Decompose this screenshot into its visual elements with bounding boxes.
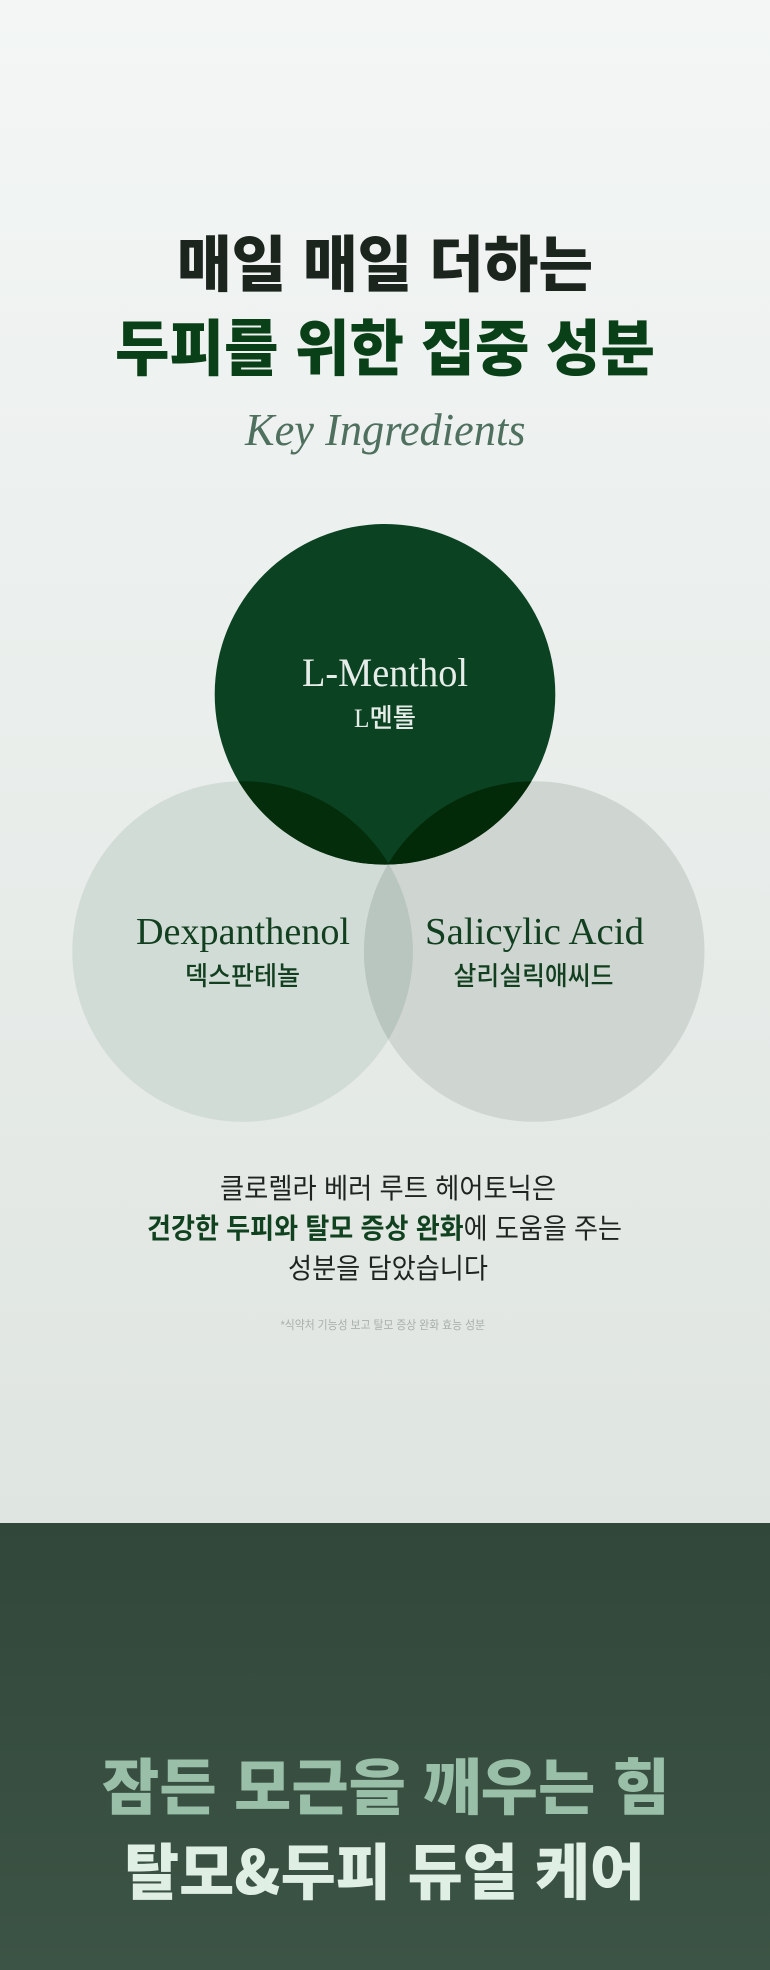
description text: 클로렐라 베러 루트 헤어토닉은 [220, 1173, 556, 1204]
label: L-Menthol: L멘톨 [354, 704, 416, 733]
bottom banner [0, 1523, 770, 1970]
title line 1: 매일 매일 더하는 [177, 215, 593, 304]
label: L-Menthol [302, 650, 468, 733]
label: Salicylic Acid: 살리실릭애씨드 [454, 961, 614, 991]
label: L-Menthol: L-Menthol [302, 650, 468, 695]
overlap: lower circles [364, 864, 413, 1040]
description text: 건강한 두피와 탈모 증상 완화에 도움을 주는 [147, 1213, 622, 1244]
label: Dexpanthenol: Dexpanthenol [136, 911, 350, 953]
venn diagram [72, 524, 705, 1122]
title line 2: 두피를 위한 집중 성분 [115, 299, 655, 388]
circle: Dexpanthenol [72, 781, 413, 1122]
label: Salicylic Acid [425, 911, 644, 991]
label: Dexpanthenol [136, 911, 350, 991]
label: Salicylic Acid: Salicylic Acid [425, 911, 644, 953]
overlap: L-Menthol and Salicylic Acid [388, 781, 532, 865]
footnote: *식약처 기능성 보고 탈모 증상 완화 효능 성분 [281, 1317, 485, 1332]
banner heading [102, 1738, 670, 1912]
overlap: L-Menthol and Dexpanthenol [238, 781, 388, 865]
subtitle: Key Ingredients [244, 404, 525, 455]
background panel [0, 0, 770, 1523]
banner line 1: 잠든 모근을 깨우는 힘 [102, 1738, 670, 1827]
banner line 2: 탈모&두피 듀얼 케어 [124, 1823, 645, 1912]
title [115, 215, 655, 388]
description text: 성분을 담았습니다 [288, 1253, 488, 1284]
circle: L-Menthol [215, 524, 555, 865]
description text [147, 1173, 622, 1284]
circle: Salicylic Acid [364, 781, 704, 1122]
label: Dexpanthenol: 덱스판테놀 [185, 961, 300, 991]
